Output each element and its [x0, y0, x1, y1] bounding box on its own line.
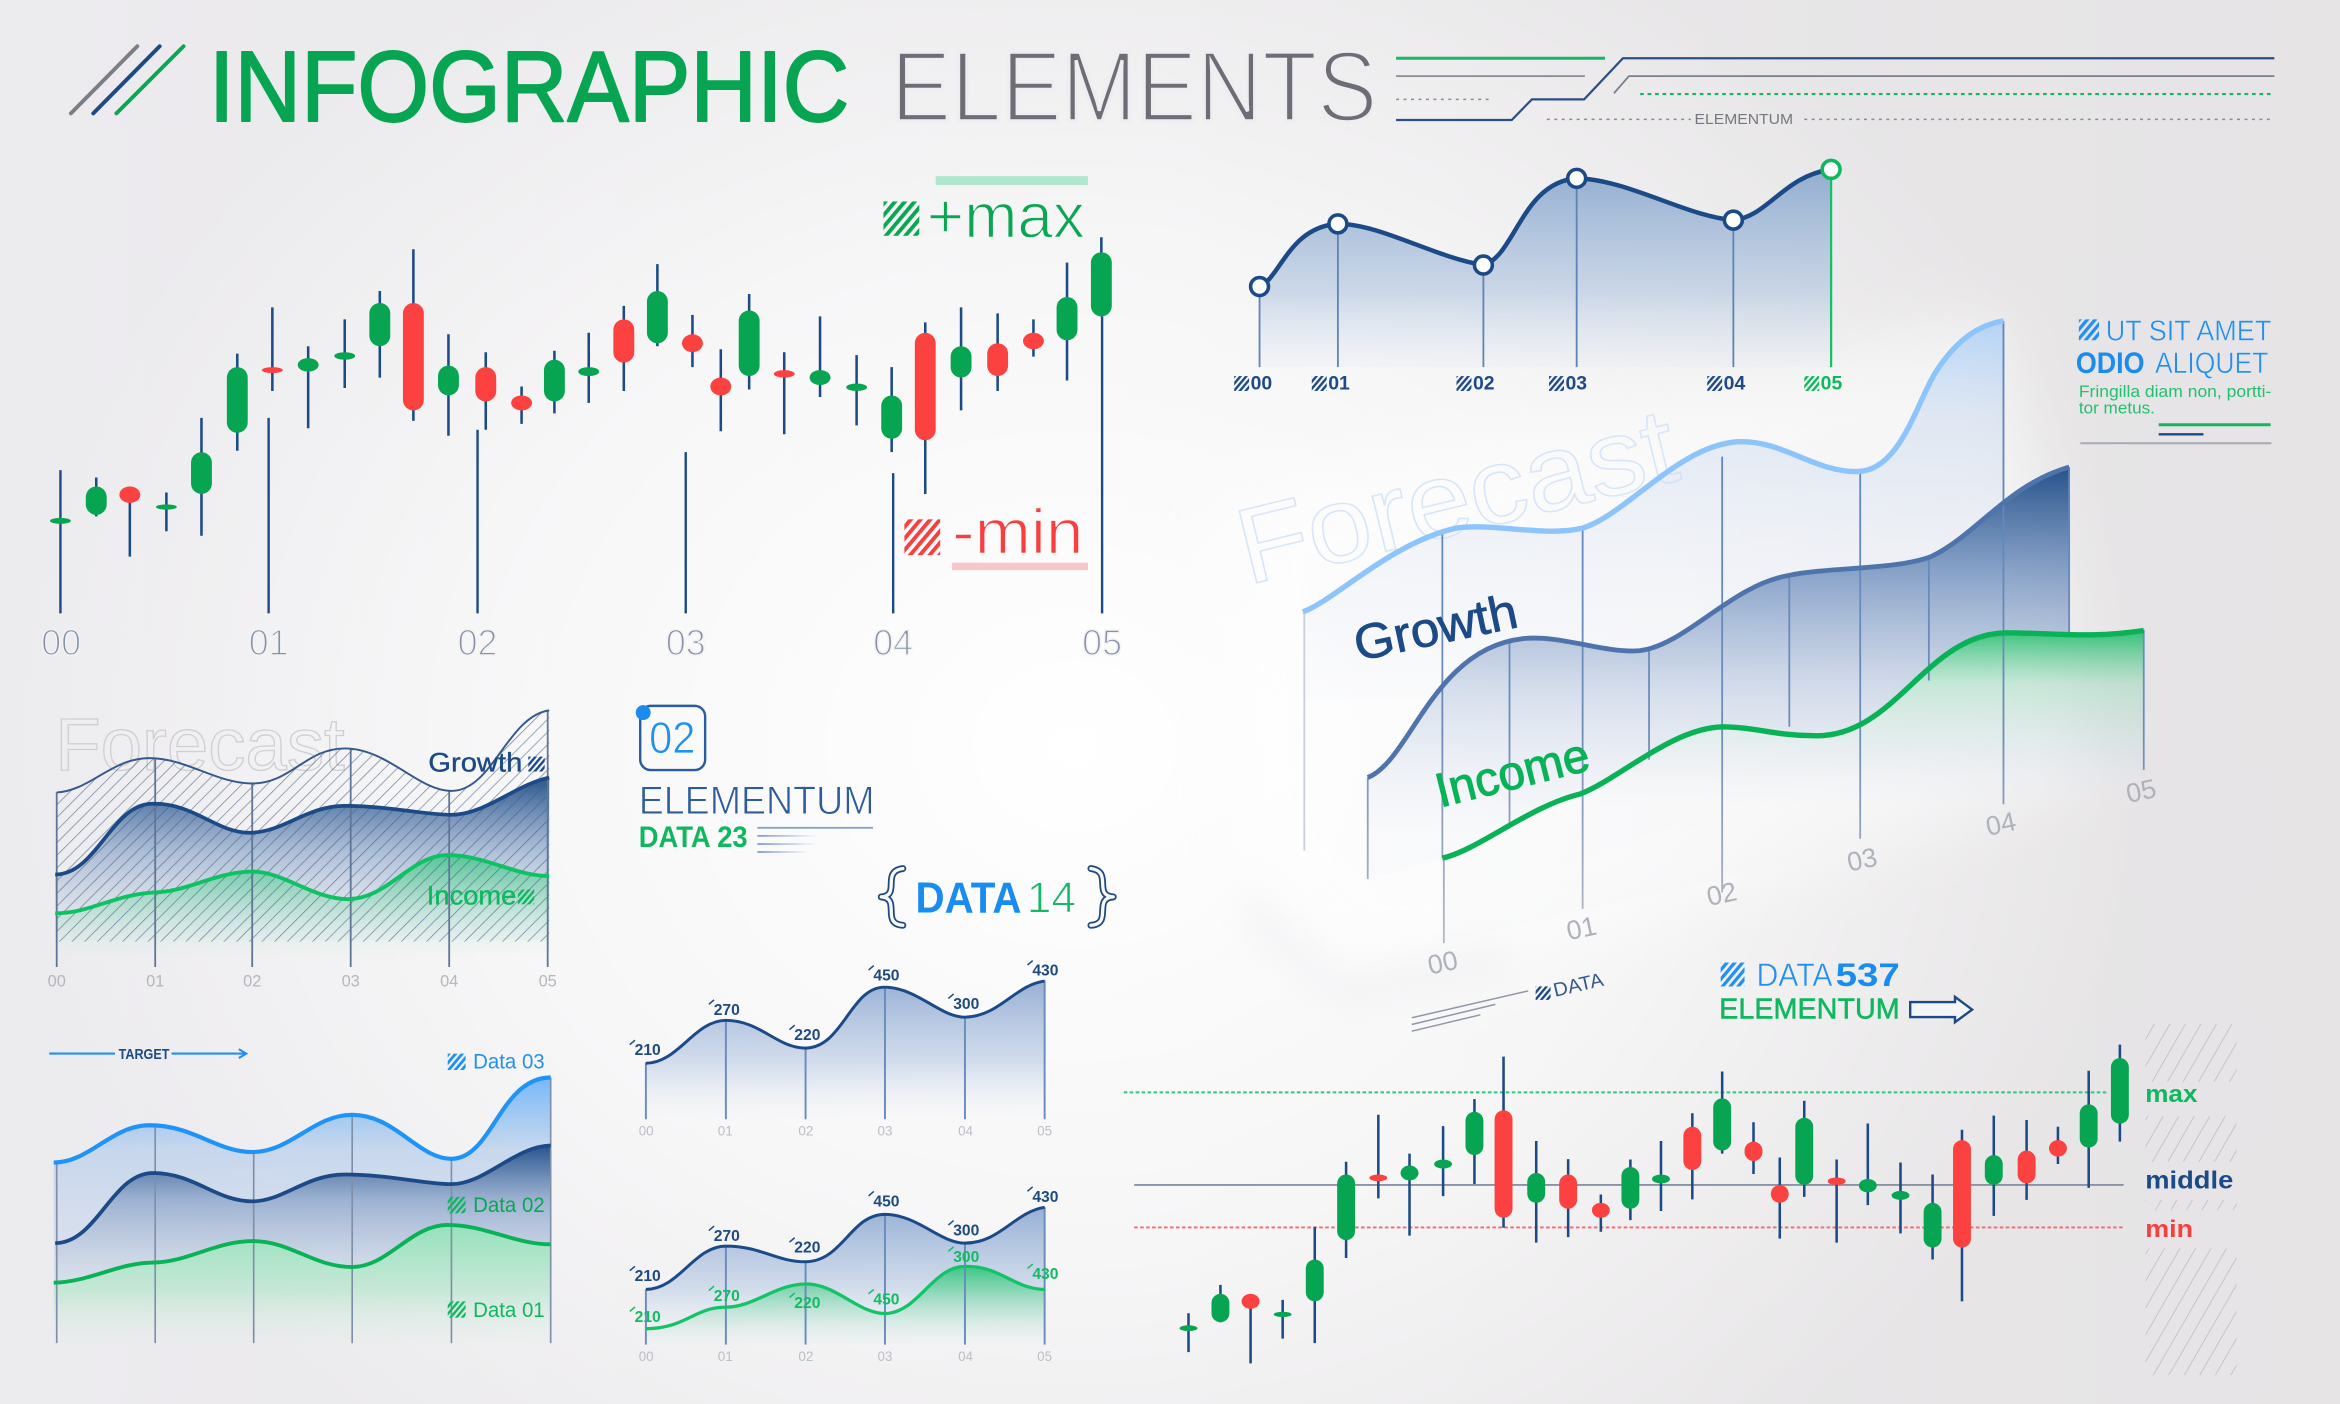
- x labels: 02: [1473, 373, 1495, 395]
- green value labels: 220: [794, 1295, 821, 1312]
- navy value labels: 210: [635, 1268, 661, 1285]
- text block: ut sit amet: ODIO: [2076, 347, 2145, 380]
- heading: data 14: 14: [1027, 875, 1076, 923]
- axis labels: 02: [243, 972, 261, 990]
- axis labels: 01: [1564, 911, 1599, 946]
- x labels: 01: [1328, 373, 1350, 395]
- axis labels: 03: [342, 972, 360, 990]
- navy value labels: 430: [1032, 1189, 1059, 1206]
- red candle bodies: [119, 303, 1044, 503]
- axis labels: [639, 1124, 1052, 1139]
- navy value labels: 220: [794, 1240, 821, 1257]
- hatched band: [57, 710, 549, 942]
- axis labels: 05: [2123, 773, 2159, 809]
- callout: DATA: DATA: [1551, 969, 1606, 1002]
- heading: ELEMENTS: ELEMENTS: [891, 31, 1377, 143]
- heading: INFOGRAPHIC: INFOGRAPHIC: [209, 31, 849, 143]
- value area chart: [630, 961, 1059, 1139]
- area: navy: [55, 778, 549, 940]
- axis labels: 01: [718, 1124, 733, 1139]
- value ticks: [630, 961, 1033, 1045]
- green candle bodies: [1180, 1058, 2129, 1331]
- header circuit lines: [1396, 58, 2274, 128]
- x labels: 00: [1251, 373, 1272, 395]
- value labels: 300: [953, 996, 980, 1013]
- drop lines: [1260, 179, 1733, 367]
- axis labels: 00: [639, 1349, 654, 1364]
- curve: navy: [646, 1207, 1045, 1289]
- green value labels: 450: [873, 1291, 900, 1308]
- drop lines: [1368, 321, 2144, 943]
- small hatched forecast chart: [48, 702, 557, 990]
- curves: [54, 1077, 551, 1163]
- axis labels: 02: [1704, 876, 1740, 912]
- value labels: 210: [635, 1042, 661, 1059]
- label: Income: Income: [1430, 729, 1595, 818]
- red candle bodies: [1242, 1110, 2067, 1309]
- axis labels: 04: [958, 1124, 974, 1139]
- candle wicks: [96, 237, 1101, 557]
- curve: [646, 981, 1045, 1063]
- value labels: 270: [714, 1002, 740, 1019]
- candle wicks: [1189, 1045, 2120, 1363]
- axis labels: [639, 1349, 1052, 1364]
- area: navy: [1368, 467, 2069, 880]
- axis labels: 03: [877, 1349, 892, 1364]
- target arrow: TARGET: [119, 1046, 169, 1063]
- axis labels: 01: [146, 972, 164, 990]
- big perspective forecast chart: [1225, 321, 2159, 1031]
- value labels: 220: [794, 1027, 821, 1044]
- axis labels: 03: [666, 623, 706, 663]
- curve: green: [1442, 631, 2144, 858]
- axis labels: 03: [1844, 842, 1880, 878]
- callout: +max: +max: [927, 181, 1085, 251]
- icon: outlined arrow: [1910, 997, 1972, 1022]
- candlestick chart: max and min: [41, 176, 1122, 663]
- area: data 01: [54, 1225, 551, 1343]
- area fill: [646, 981, 1045, 1119]
- text block: ut sit amet: UT SIT AMET: [2106, 315, 2271, 347]
- label: ELEMENTUM: ELEMENTUM: [1695, 111, 1793, 128]
- axis labels: 05: [1082, 623, 1122, 663]
- line chart with markers: [1234, 160, 1842, 395]
- axis labels: 04: [958, 1349, 974, 1364]
- area: green: [55, 855, 549, 955]
- axis labels: 05: [1037, 1349, 1052, 1364]
- curve: navy: [1368, 467, 2069, 778]
- drop lines: [646, 980, 1045, 1119]
- heading: data 537: 537: [1836, 956, 1900, 993]
- curve: blue: [1303, 321, 2003, 612]
- heading: data 537: ELEMENTUM: [1719, 993, 1900, 1025]
- text block: ut sit amet: Fringilla diam non, portti-: [2079, 383, 2271, 401]
- pale drop lines: [1303, 612, 1305, 851]
- drop lines: [57, 1077, 551, 1343]
- value labels: 450: [873, 967, 900, 984]
- reference lines: [1134, 1184, 2124, 1186]
- text block: ut sit amet: tor metus.: [2079, 399, 2155, 417]
- badge: 02 elementum: 02: [649, 713, 695, 763]
- label: Growth: Growth: [428, 748, 522, 778]
- markers: [1251, 160, 1840, 295]
- right brace: [1091, 869, 1113, 925]
- watermark: Forecast: Forecast: [1225, 385, 1688, 607]
- axis labels: 02: [458, 623, 497, 663]
- drop lines: [646, 1207, 1045, 1345]
- green value labels: 300: [953, 1249, 980, 1266]
- navy value labels: 300: [953, 1223, 980, 1240]
- x labels: 05: [1821, 373, 1842, 395]
- green candle bodies: [50, 252, 1112, 524]
- badge: 02 elementum: [636, 705, 875, 854]
- area fill: navy: [646, 1207, 1045, 1343]
- navy value ticks: [630, 1187, 1033, 1271]
- heading: data 537: DATA: [1756, 956, 1833, 993]
- badge: 02 elementum: DATA 23: [639, 821, 748, 854]
- area: data 03: [54, 1077, 551, 1283]
- text block: ut sit amet: ALIQUET: [2155, 347, 2268, 380]
- green value ticks: [630, 1247, 1033, 1311]
- heading: data 537: [1719, 956, 1972, 1025]
- left brace: [881, 869, 903, 925]
- label: max: max: [2145, 1081, 2198, 1108]
- icon: three slanted lines: [71, 46, 184, 113]
- callout: -min: -min: [952, 498, 1083, 568]
- axis labels: 02: [798, 1124, 813, 1139]
- axis lines: [60, 316, 1102, 613]
- axis labels: 00: [639, 1124, 654, 1139]
- axis labels: 04: [1983, 806, 2019, 842]
- axis labels: 04: [440, 972, 458, 990]
- curves: [57, 710, 549, 792]
- axis labels: 03: [877, 1124, 892, 1139]
- badge: 02 elementum: ELEMENTUM: [639, 778, 875, 823]
- axis labels: 05: [1037, 1124, 1052, 1139]
- callout: -min: [904, 498, 1088, 570]
- axis labels: [41, 623, 1122, 663]
- axis labels: 02: [798, 1349, 813, 1364]
- text block: ut sit amet: [2076, 315, 2271, 443]
- navy value labels: 450: [873, 1193, 900, 1210]
- callout: DATA: [1412, 969, 1606, 1031]
- area: data 02: [55, 1146, 551, 1283]
- target arrow: [49, 1046, 246, 1063]
- green value labels: 430: [1032, 1266, 1059, 1283]
- legend: data 02: Data 02: [473, 1194, 545, 1217]
- navy value labels: 270: [714, 1228, 740, 1245]
- target stacked area chart: [49, 1046, 551, 1343]
- axis labels: 00: [48, 972, 66, 990]
- area fill: green: [646, 1266, 1045, 1343]
- legend: data 03: Data 03: [473, 1051, 545, 1074]
- label: Growth: Growth: [1349, 584, 1522, 672]
- double value area chart: [630, 1187, 1059, 1364]
- area: green: [1442, 631, 2144, 943]
- area fill: [1260, 169, 1831, 367]
- axis labels: 00: [1425, 945, 1460, 980]
- candlestick chart: max middle min: [1124, 1024, 2237, 1375]
- value labels: [635, 963, 1059, 1059]
- heading: data 14: [881, 869, 1113, 925]
- green value labels: 210: [635, 1309, 661, 1326]
- axis labels: [48, 972, 557, 990]
- value labels: 430: [1032, 963, 1059, 980]
- label: min: min: [2145, 1216, 2193, 1243]
- title: [71, 31, 1377, 143]
- green value labels: 270: [714, 1288, 740, 1305]
- drop lines: [57, 710, 548, 967]
- axis labels: 01: [718, 1349, 733, 1364]
- label: Income: Income: [427, 880, 516, 910]
- axis labels: 04: [873, 623, 913, 663]
- navy value labels: [635, 1189, 1059, 1285]
- watermark: Forecast: Forecast: [55, 702, 345, 786]
- legend: data 01: Data 01: [473, 1299, 545, 1322]
- curve: green: [646, 1266, 1045, 1329]
- x labels: 03: [1565, 373, 1587, 395]
- heading: data 14: DATA: [916, 875, 1022, 923]
- area: blue: [1303, 321, 2003, 701]
- axis labels: 01: [249, 623, 289, 663]
- green value labels: [635, 1249, 1059, 1326]
- curve: [1260, 169, 1831, 287]
- axis labels: 00: [41, 623, 81, 663]
- axis labels: 05: [539, 972, 557, 990]
- label: middle: middle: [2145, 1167, 2233, 1195]
- x labels: 04: [1724, 373, 1745, 395]
- x labels: [1234, 373, 1842, 395]
- hatched side bands: [2146, 1024, 2237, 1375]
- axis labels: [1425, 773, 2159, 980]
